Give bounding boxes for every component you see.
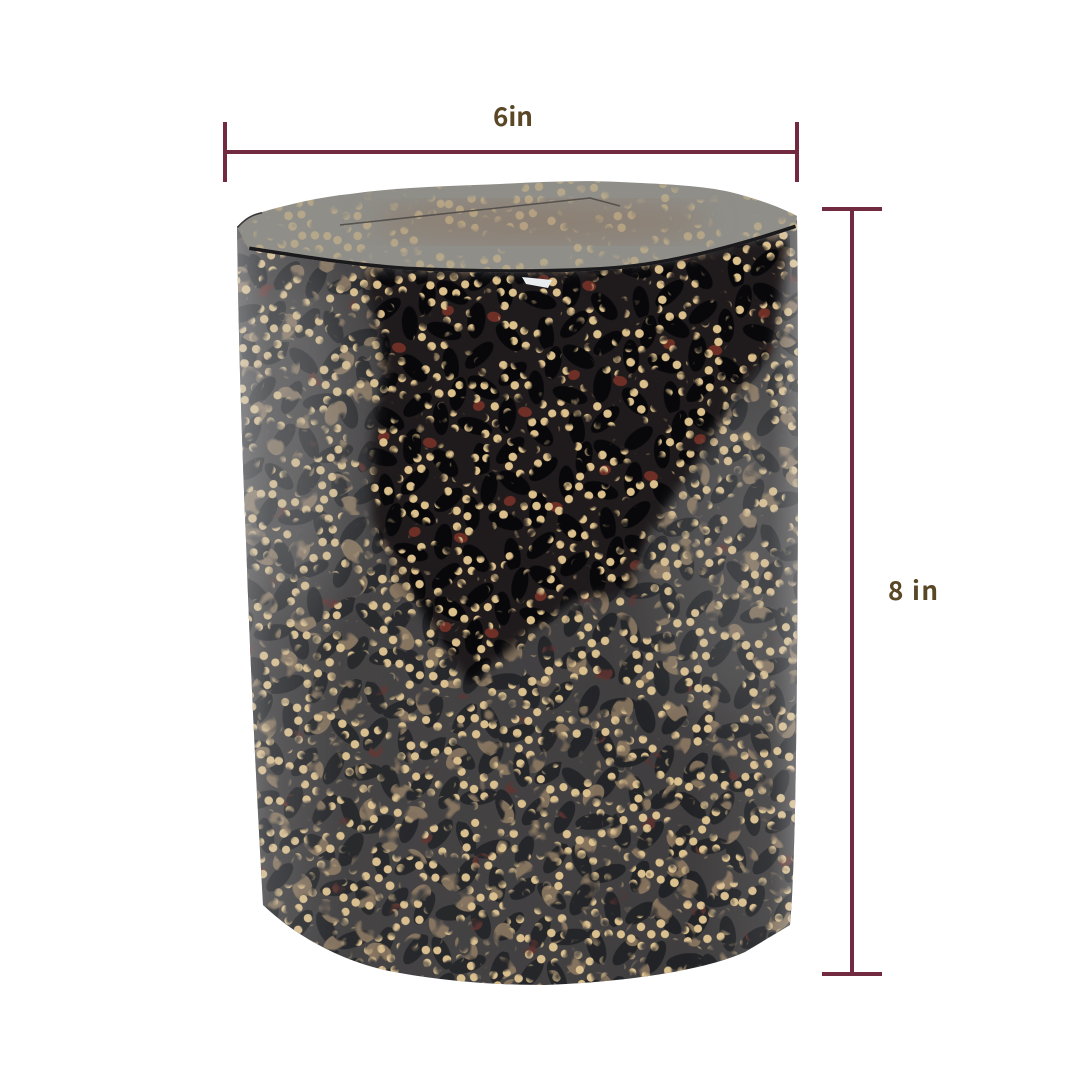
height label: 8 in: [888, 571, 939, 608]
height dimension line: [822, 207, 882, 976]
cylinder top face under plastic: [237, 181, 797, 273]
product photo: seed cylinder: [230, 178, 805, 990]
width label: 6in: [493, 97, 533, 134]
exposed dark seed window: [360, 235, 790, 695]
plastic glare on seed edge: [522, 277, 552, 288]
width dimension line: [223, 122, 799, 182]
cylinder body: wrapped seeds: [230, 220, 805, 990]
